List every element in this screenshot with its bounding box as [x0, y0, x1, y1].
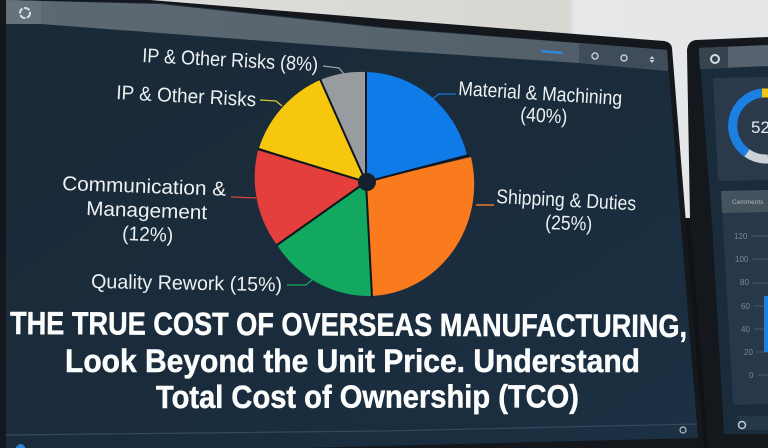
tick 100: 100: [735, 255, 749, 264]
secondary monitor: [687, 37, 768, 448]
slice: shipping and duties 25%: [366, 157, 474, 296]
label: IP and other risks 8%: IP & Other Risks (8%): [142, 45, 319, 76]
bar: [764, 296, 768, 352]
title block: [10, 305, 687, 415]
label: IP and other risks: IP & Other Risks: [116, 82, 257, 111]
title bar controls: [541, 43, 668, 71]
leader line red: [231, 197, 256, 198]
bar chart panel: [721, 190, 768, 405]
label line one: Communication &: [62, 173, 227, 201]
icon: status bar right: [680, 427, 686, 433]
panel header: [721, 190, 768, 213]
pie centre hub: [358, 173, 376, 191]
donut arc blue: [733, 93, 762, 153]
title line two: Look Beyond the Unit Price. Understand: [65, 343, 640, 379]
label line two: (25%): [545, 212, 593, 236]
icon: secondary menu ring: [711, 55, 719, 63]
secondary menu button: [699, 47, 728, 69]
label: material and machining: [432, 78, 623, 128]
tick 20: 20: [744, 348, 753, 357]
donut chart: [733, 93, 768, 159]
donut arc yellow: [762, 88, 768, 98]
panel header text: Cemments: [732, 199, 764, 206]
tick 120: 120: [734, 232, 748, 241]
secondary monitor bezel: [687, 37, 768, 448]
window menu button: [6, 0, 41, 24]
secondary title bar: [699, 45, 768, 69]
leader line green: [287, 279, 313, 285]
leader line yellow: [260, 100, 282, 106]
donut arc grey: [747, 153, 768, 159]
slice separators: [258, 72, 469, 297]
icon: control two: [621, 55, 627, 61]
slice: quality rework 15%: [277, 182, 372, 296]
icon: control three: [650, 56, 654, 63]
tick 0: 0: [749, 371, 754, 380]
axis labels: [734, 232, 754, 380]
label: quality rework: Quality Rework (15%): [91, 271, 282, 296]
secondary monitor screen: [699, 45, 768, 434]
leader line grey: [323, 66, 344, 74]
label line one: Material & Machining: [458, 78, 623, 110]
slice: communication and management 12%: [255, 150, 366, 245]
icon: control one: [592, 53, 598, 59]
status bar divider: [6, 424, 697, 435]
title line three: Total Cost of Ownership (TCO): [156, 378, 579, 415]
donut panel: [713, 77, 768, 181]
icon: menu ring: [20, 8, 30, 18]
tick 80: 80: [740, 278, 749, 287]
slice: material and machining 40%: [366, 72, 467, 182]
secondary status bar: [737, 416, 768, 430]
tick 60: 60: [741, 302, 750, 311]
secondary status icon: [738, 422, 746, 428]
slice: IP and other risks: [259, 80, 366, 182]
icon: status bar left: [16, 444, 25, 448]
label line three: (12%): [122, 223, 174, 247]
label line two: (40%): [520, 104, 568, 128]
slice: IP and other risks 8%: [320, 72, 366, 182]
active tab indicator: [541, 51, 563, 53]
dark gap between monitors: [680, 218, 730, 448]
pie labels: [62, 45, 637, 296]
leader line blue: [432, 94, 456, 99]
pie chart: [255, 72, 474, 297]
label line one: Shipping & Duties: [496, 186, 637, 215]
label: shipping and duties: [476, 186, 637, 236]
window title bar: [6, 0, 668, 71]
leader line orange: [476, 204, 494, 206]
tick 40: 40: [741, 325, 750, 334]
label line two: Management: [86, 198, 208, 224]
label: communication and management: [62, 173, 256, 247]
